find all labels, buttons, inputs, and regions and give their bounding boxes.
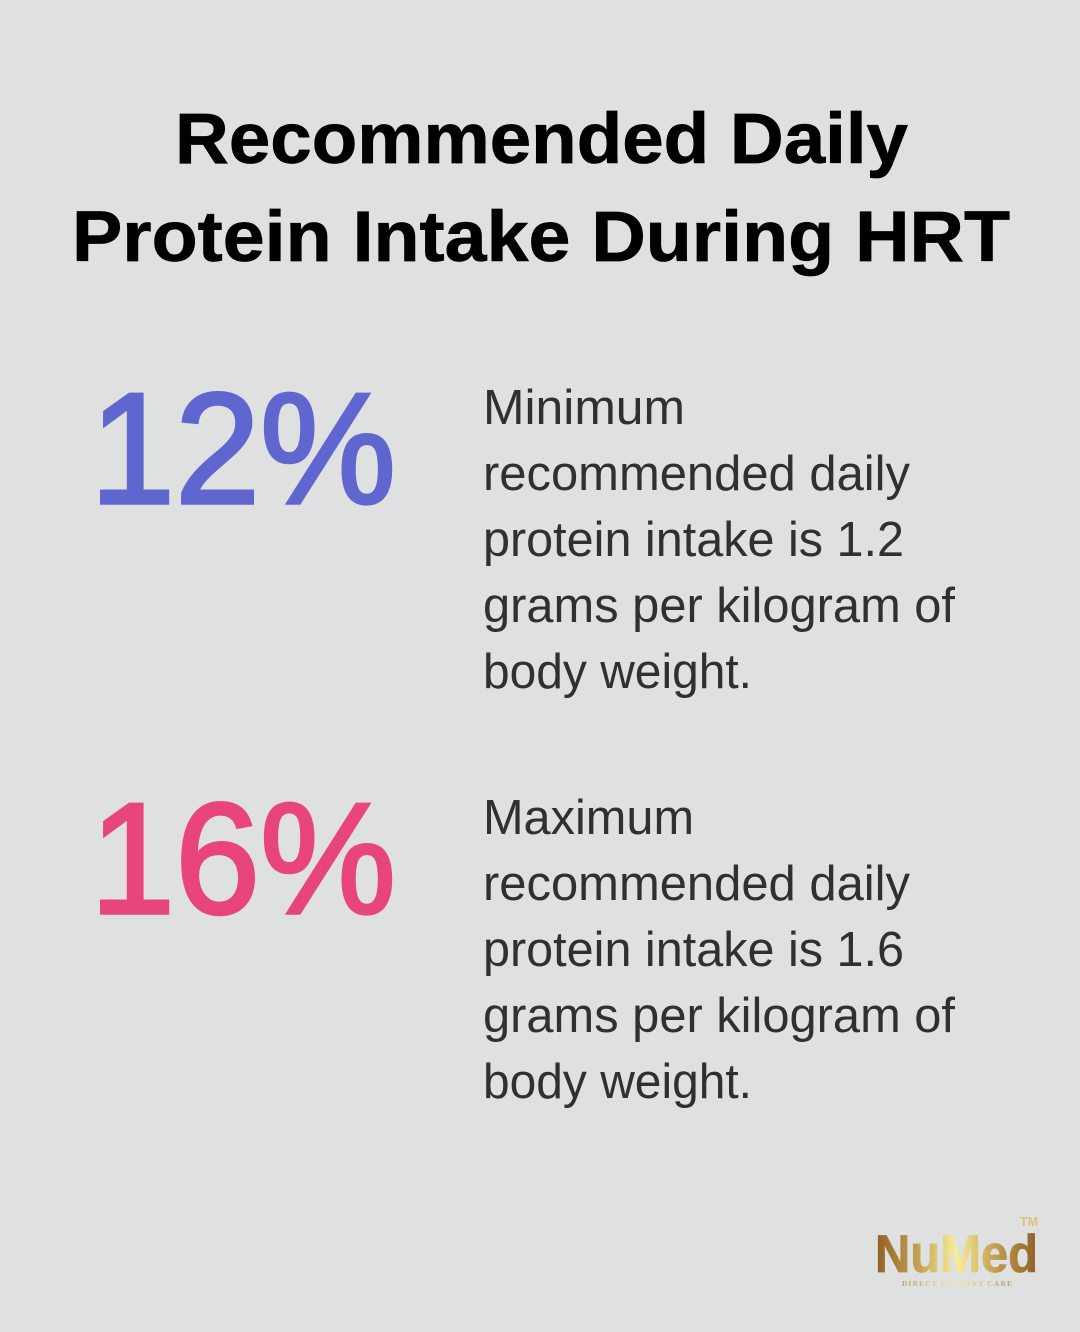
text: minimum protein intake: Minimum xyxy=(483,381,685,435)
text: minimum protein intake: grams per kilogram of xyxy=(483,579,955,633)
text: maximum protein intake: protein intake is 1.6 xyxy=(483,923,904,977)
text: maximum protein intake: grams per kilogram of xyxy=(483,989,955,1043)
title: Recommended Daily xyxy=(175,100,909,179)
logo tagline: DIRECT PRIMARY CARE xyxy=(902,1279,1012,1288)
logo: NuMed xyxy=(875,1214,1038,1288)
number: 16%: 16% xyxy=(90,771,396,947)
text: maximum protein intake xyxy=(483,791,955,1109)
text: maximum protein intake: body weight. xyxy=(483,1055,752,1109)
trademark mark: TM xyxy=(1020,1214,1038,1229)
title xyxy=(72,100,1010,277)
text: minimum protein intake: recommended daily xyxy=(483,447,910,501)
stat: 12% minimum xyxy=(90,361,955,699)
text: maximum protein intake: recommended daily xyxy=(483,857,910,911)
text: minimum protein intake: body weight. xyxy=(483,645,752,699)
text: maximum protein intake: Maximum xyxy=(483,791,694,845)
number: 12%: 12% xyxy=(90,361,396,537)
title: Protein Intake During HRT xyxy=(72,198,1010,277)
stat: 16% maximum xyxy=(90,771,955,1109)
logo wordmark: NuMed xyxy=(875,1225,1038,1284)
text: minimum protein intake xyxy=(483,381,955,699)
text: minimum protein intake: protein intake is 1.2 xyxy=(483,513,904,567)
